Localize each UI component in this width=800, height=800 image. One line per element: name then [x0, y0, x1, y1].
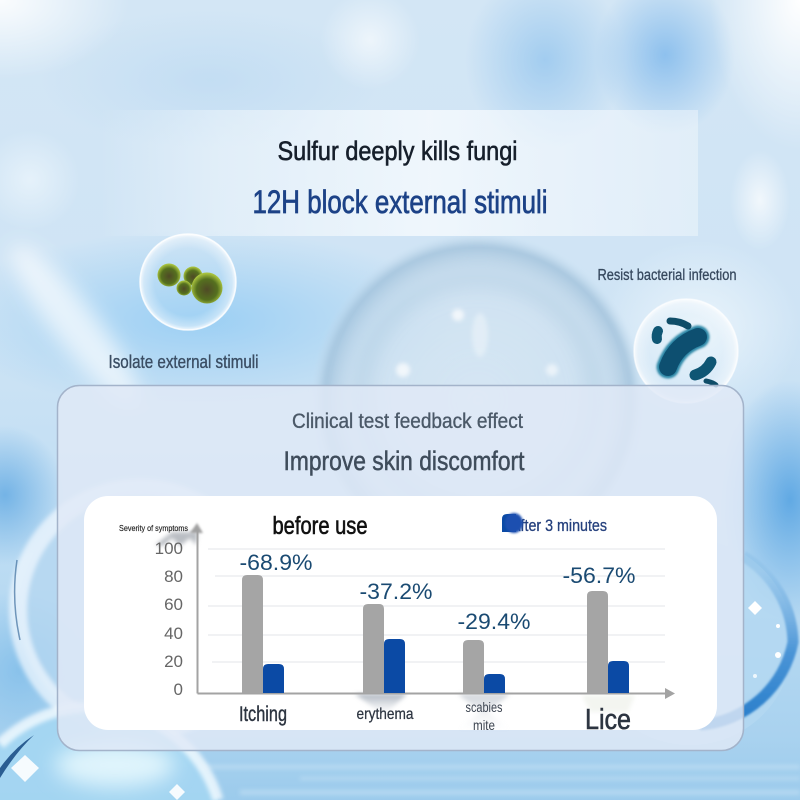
label: isolate external stimuli: Isolate external stimuli: [108, 352, 258, 372]
bar group: lice: [562, 563, 636, 736]
chart gridlines: [208, 549, 665, 662]
y axis numbers: 100: [155, 539, 183, 558]
chart card: [84, 496, 717, 736]
chart axes: [190, 523, 675, 699]
y axis numbers: 0: [174, 680, 183, 699]
bar group: itching: [239, 550, 312, 726]
top translucent title band: [100, 110, 698, 236]
bar group: itching: Itching: [239, 703, 287, 726]
panel heading: Improve skin discomfort: [284, 446, 525, 476]
y axis numbers: 40: [164, 624, 183, 643]
y axis numbers: 80: [164, 567, 183, 586]
label: resist bacterial infection: Resist bacterial infection: [598, 267, 736, 284]
legend: after 3 minutes: After 3 minutes: [511, 517, 607, 535]
title: line one: Sulfur deeply kills fungi: [278, 136, 518, 166]
y axis numbers: [155, 539, 183, 699]
icon: bacteria in bubble: [634, 299, 738, 403]
legend: after 3 minutes: [502, 513, 607, 535]
smudges around axis labels: [155, 532, 635, 730]
bar group: erythema: -37.2%: [360, 579, 432, 604]
title: line two: 12H block external stimuli: [252, 184, 548, 220]
icon: fungi in bubble: [140, 234, 236, 330]
panel: clinical test feedback: [58, 386, 744, 750]
bar group: scabies mite: -29.4%: [458, 609, 530, 634]
bar group: erythema: erythema: [356, 706, 414, 723]
bar group: itching: -68.9%: [240, 550, 312, 575]
bubbles in background: [0, 233, 793, 800]
y axis numbers: 20: [164, 652, 183, 671]
bar group: lice: -56.7%: [562, 563, 636, 588]
bar group: lice: Lice: [585, 704, 631, 736]
y axis numbers: 60: [164, 595, 183, 614]
bar group: scabies mite: mite: [473, 717, 495, 733]
water ripples: [200, 765, 800, 795]
legend: before use: before use: [272, 512, 368, 540]
bar group: scabies mite: [458, 609, 530, 733]
bar group: scabies mite: scabies: [466, 699, 502, 715]
axis label: severity of symptoms: Severity of symptoms: [119, 523, 188, 533]
panel subtitle: Clinical test feedback effect: [292, 410, 523, 433]
bar group: erythema: [356, 579, 432, 723]
